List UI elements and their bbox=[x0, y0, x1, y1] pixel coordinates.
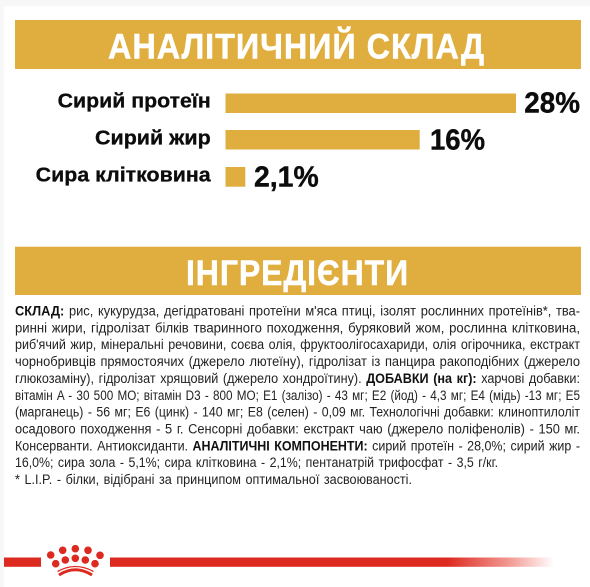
panel: analytical composition bbox=[15, 20, 581, 194]
text block: ingredients list: * L.I.P. - білки, відібрані за принципом оптимальної засвоюваності. bbox=[15, 472, 412, 488]
text block: ingredients list bbox=[15, 304, 580, 488]
heading banner: analytical composition: АНАЛІТИЧНИЙ СКЛАД bbox=[108, 26, 485, 66]
bar row: crude fat 16% bbox=[95, 124, 485, 156]
bar row: crude protein 28% bbox=[58, 88, 580, 120]
heading banner: ingredients: ІНГРЕДІЄНТИ bbox=[186, 254, 409, 293]
icon: royal crown bbox=[47, 545, 104, 575]
text block: ingredients list: 16,0%; сира зола - 5,1%; сира клітковина - 2,1%; пентанатрій трифосфат - 3,5 г/кг. bbox=[15, 455, 498, 471]
bar row: crude fibre 2.1%: 2,1% bbox=[254, 162, 319, 194]
footer: red brand stripe with crown logo bbox=[4, 545, 554, 575]
bar row: crude fat 16%: Сирий жир bbox=[95, 127, 211, 149]
bar row: crude protein 28%: Сирий протеїн bbox=[58, 91, 211, 113]
heading banner: ingredients bbox=[15, 247, 581, 295]
heading banner: analytical composition bbox=[15, 20, 581, 69]
bar row: crude fibre 2.1%: Сира клітковина bbox=[36, 165, 212, 187]
bar row: crude fat 16%: 16% bbox=[430, 124, 485, 156]
text block: ingredients list: глюкозаміну), гідролізат хрящовий (джерело хондроїтину). ДОБАВКИ (на кг): харчові добавки: bbox=[15, 371, 580, 387]
bar row: crude fibre 2.1% bbox=[36, 162, 319, 194]
bar row: crude protein 28%: 28% bbox=[524, 88, 580, 120]
